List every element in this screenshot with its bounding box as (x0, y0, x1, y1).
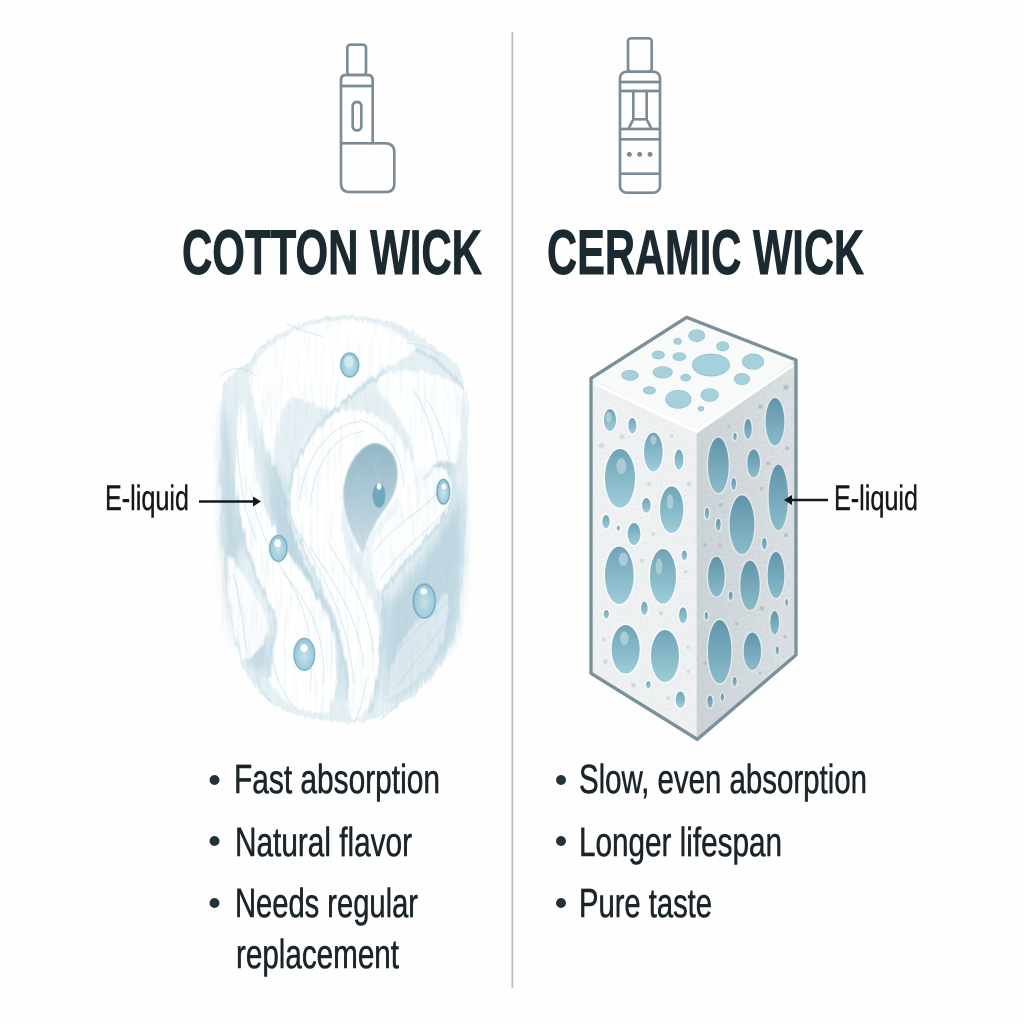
heading: ceramic wick: CERAMIC WICK (547, 218, 864, 288)
list: cotton wick properties: Fast absorption (234, 756, 440, 802)
callout: right e-liquid label with arrow: E-liquid (834, 479, 918, 518)
list: ceramic wick properties (556, 756, 867, 926)
divider line (512, 32, 513, 988)
white strands (227, 320, 463, 720)
shaded folds (221, 400, 464, 710)
liquid droplets (270, 353, 450, 670)
left face (591, 378, 697, 739)
hollow fold (343, 443, 398, 557)
fibre texture (222, 316, 467, 722)
left pore highlights (606, 412, 673, 645)
list: cotton wick properties: Natural flavor (235, 819, 412, 865)
callout: left e-liquid label with arrow: E-liquid (105, 479, 189, 518)
heading: cotton wick: COTTON WICK (182, 218, 482, 288)
left face pores (602, 408, 688, 708)
icon: cotton wick vape device (341, 45, 394, 192)
list: cotton wick properties: Needs regular (235, 880, 418, 926)
list: ceramic wick properties: Longer lifespan (579, 819, 782, 865)
fold edges (240, 350, 463, 713)
small surface pits (599, 434, 691, 700)
callout: right e-liquid label with arrow (784, 479, 918, 518)
illustration: cotton wick (213, 310, 477, 730)
list: cotton wick properties (210, 756, 440, 977)
top face (591, 317, 796, 432)
block outline (591, 317, 796, 739)
list: ceramic wick properties: Slow, even absorption (579, 756, 867, 802)
right face pores (704, 397, 789, 709)
list: ceramic wick properties: Pure taste (579, 880, 712, 926)
fibre lines (220, 323, 460, 724)
list: cotton wick properties: replacement (236, 931, 399, 977)
icon: ceramic wick vape device (620, 38, 660, 193)
top pores (622, 330, 764, 411)
right face (697, 360, 796, 739)
illustration: ceramic wick block (590, 317, 797, 740)
